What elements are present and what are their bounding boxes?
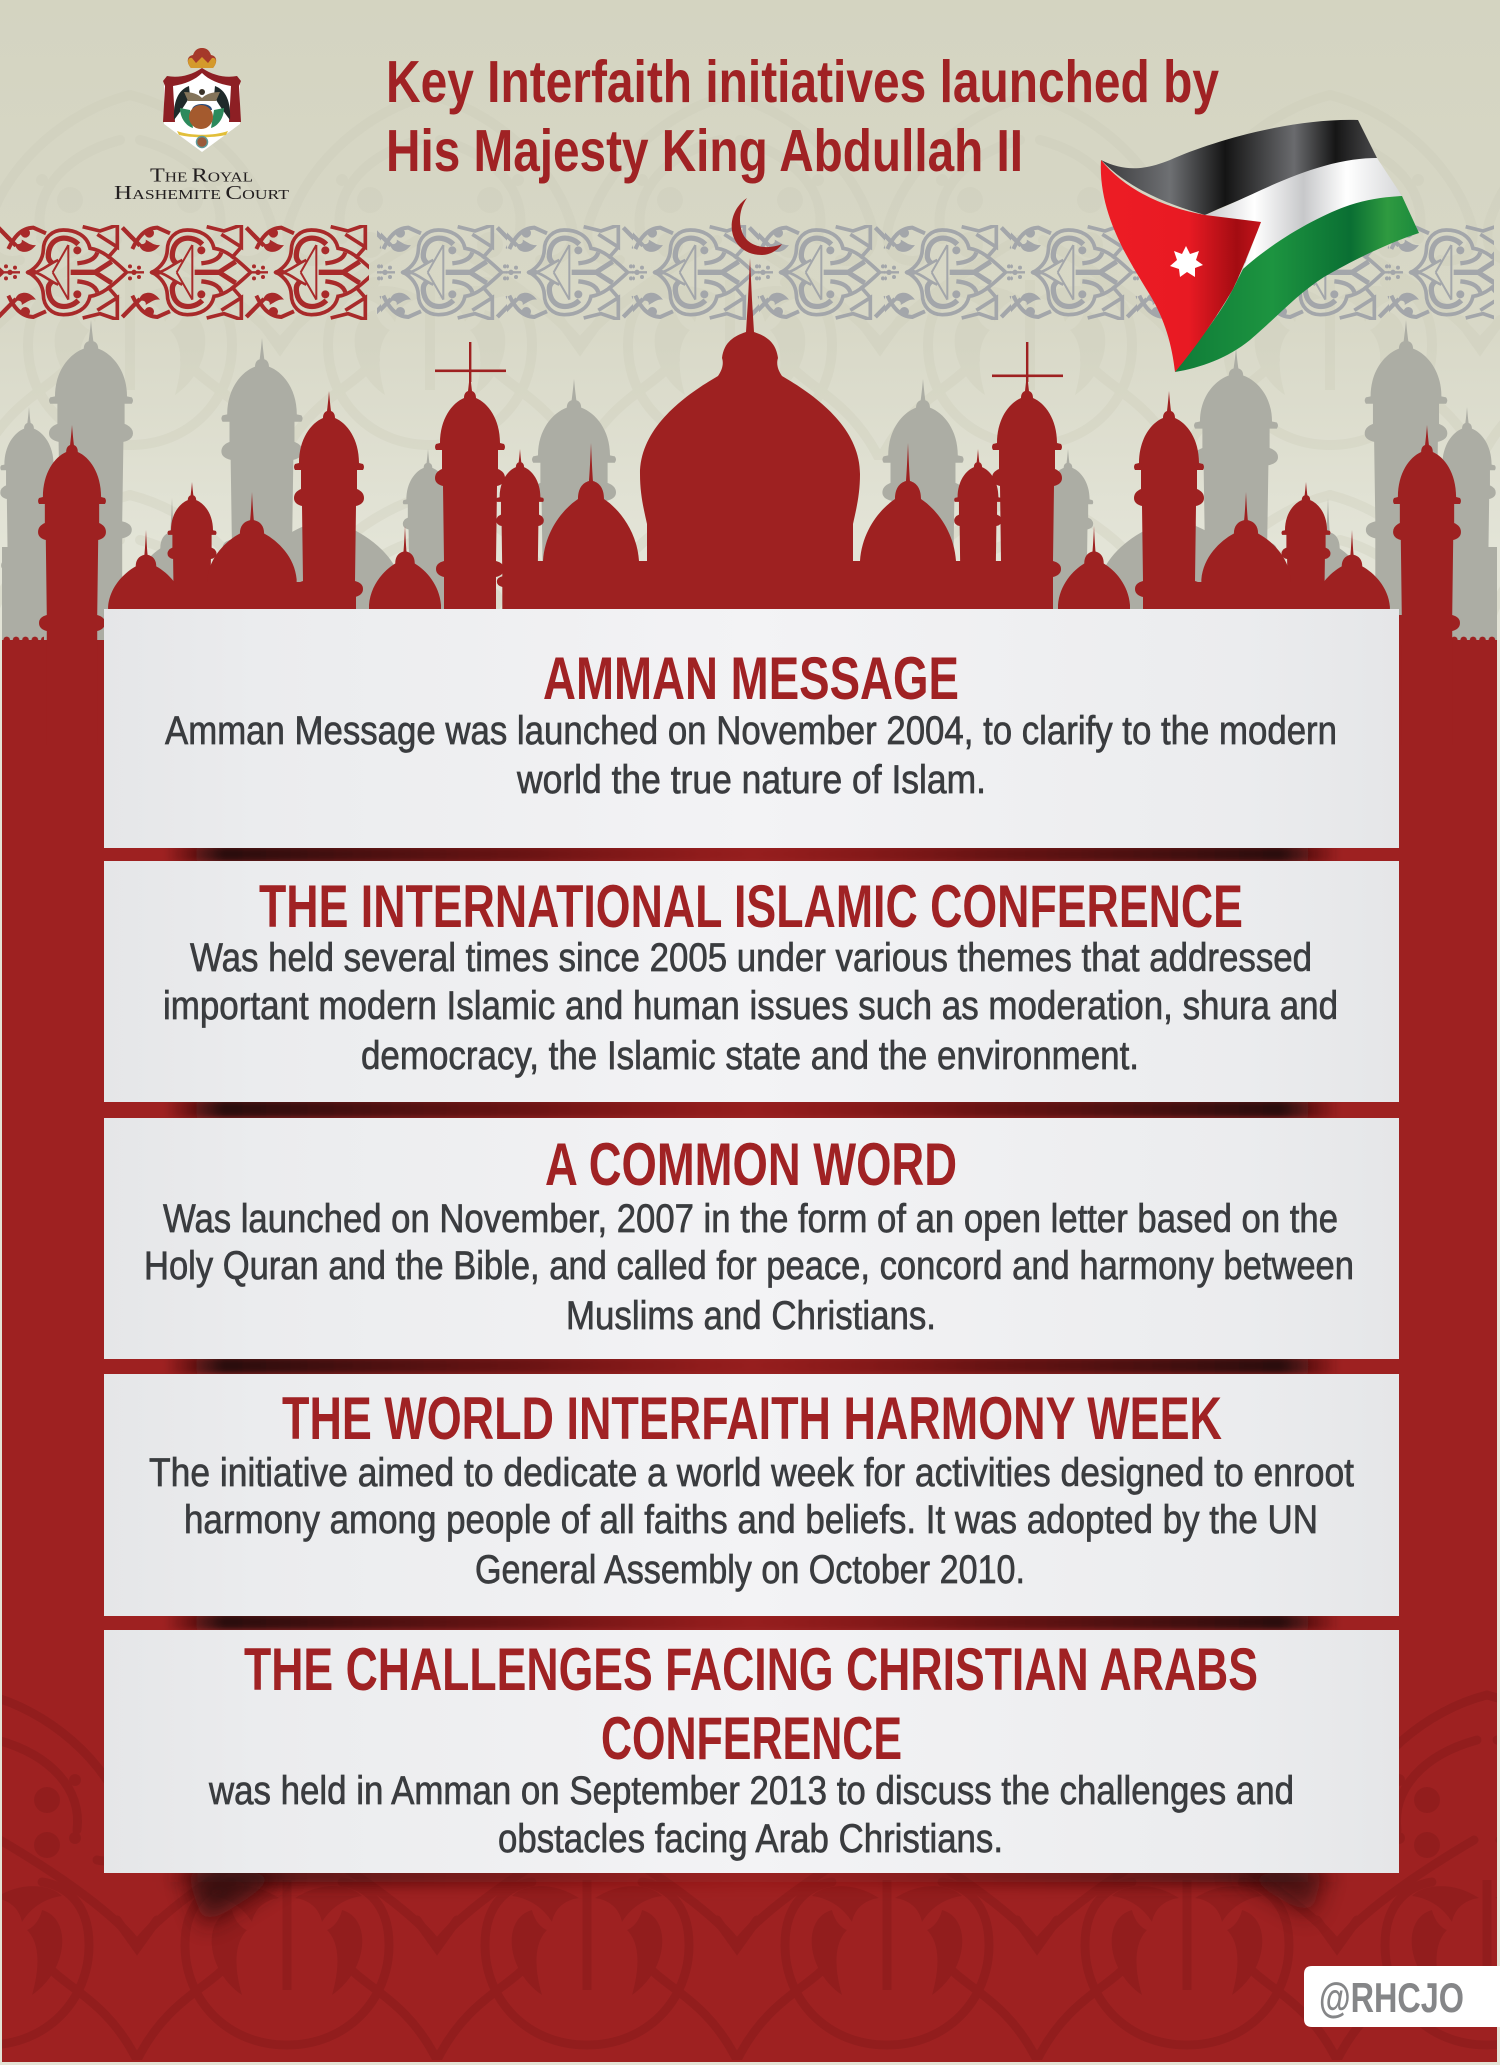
- logo: Royal Hashemite Court crest: [114, 48, 290, 204]
- icon: crown: [188, 48, 216, 68]
- panel: World Interfaith Harmony Week: [104, 1374, 1399, 1616]
- icon: crescent: [732, 198, 782, 255]
- heading: The World Interfaith Harmony Week: THE WORLD INTERFAITH HARMONY WEEK: [282, 1385, 1222, 1452]
- red panel: [2, 635, 1497, 2062]
- panel: Amman Message: [104, 609, 1399, 848]
- text: Amman Message description: [165, 709, 1337, 802]
- text: Challenges conference description: obstacles facing Arab Christians.: [498, 1817, 1003, 1861]
- text: International Islamic Conference description: important modern Islamic and human issues such as moderation, shura and: [163, 984, 1338, 1028]
- flag: green stripe: [1175, 196, 1419, 372]
- panel: A Common Word: [104, 1118, 1399, 1359]
- flag: black stripe: [1101, 120, 1377, 215]
- text: A Common Word description: [144, 1197, 1354, 1338]
- flag: star: [1170, 246, 1203, 277]
- heading: A Common Word: A COMMON WORD: [545, 1131, 957, 1198]
- icon: mantle and shield: [163, 68, 241, 152]
- text: World Interfaith Harmony Week description: General Assembly on October 2010.: [475, 1548, 1025, 1592]
- text: Amman Message description: Amman Message was launched on November 2004, to clarify to the modern: [165, 709, 1337, 753]
- text: World Interfaith Harmony Week description: The initiative aimed to dedicate a world week for activities designed to enroot: [149, 1451, 1354, 1495]
- text: Challenges conference description: [208, 1769, 1294, 1861]
- text: International Islamic Conference description: [163, 936, 1338, 1078]
- text: The Royal Hashemite Court: THE ROYAL: [150, 164, 253, 186]
- text: Amman Message description: world the true nature of Islam.: [516, 758, 986, 802]
- title: His Majesty King Abdullah II: [386, 118, 1023, 184]
- flag: white stripe: [1205, 158, 1402, 269]
- text: World Interfaith Harmony Week description: [149, 1451, 1354, 1592]
- panel: International Islamic Conference: [104, 861, 1399, 1102]
- text: World Interfaith Harmony Week description: harmony among people of all faiths and beliefs. It was adopted by the UN: [184, 1498, 1318, 1542]
- text: Challenges conference description: was held in Amman on September 2013 to discuss the challenges and: [208, 1769, 1294, 1813]
- icon: coat of arms wings: [174, 86, 190, 120]
- ornamental band: gray: [377, 225, 1494, 320]
- ornamental band: red: [0, 225, 369, 320]
- heading: The Challenges Facing Christian Arabs Conference: [244, 1636, 1258, 1772]
- panel: Challenges Facing Christian Arabs Conference: [104, 1630, 1399, 1873]
- heading: Amman Message: AMMAN MESSAGE: [543, 645, 959, 712]
- heading: The Challenges Facing Christian Arabs Conference: CONFERENCE: [601, 1705, 902, 1772]
- text: The Royal Hashemite Court: H ASHEMITE COURT: [114, 182, 290, 204]
- shadows beneath cards: [165, 846, 1340, 1925]
- text: A Common Word description: Was launched on November, 2007 in the form of an open letter based on the: [163, 1197, 1338, 1241]
- text: International Islamic Conference description: democracy, the Islamic state and the environment.: [361, 1034, 1139, 1078]
- text: International Islamic Conference description: Was held several times since 2005 under various themes that addressed: [190, 936, 1312, 980]
- skyline: gray silhouettes: [0, 320, 1497, 718]
- text: The Royal Hashemite Court: [114, 164, 290, 204]
- title: [386, 49, 1219, 184]
- icon: main dome: [640, 258, 860, 610]
- flag: red triangle: [1101, 160, 1261, 372]
- flag of Jordan: [1101, 120, 1419, 372]
- text: A Common Word description: Muslims and Christians.: [566, 1294, 936, 1338]
- skyline: red silhouettes: [38, 198, 1461, 745]
- title: Key Interfaith initiatives launched by: [386, 49, 1219, 115]
